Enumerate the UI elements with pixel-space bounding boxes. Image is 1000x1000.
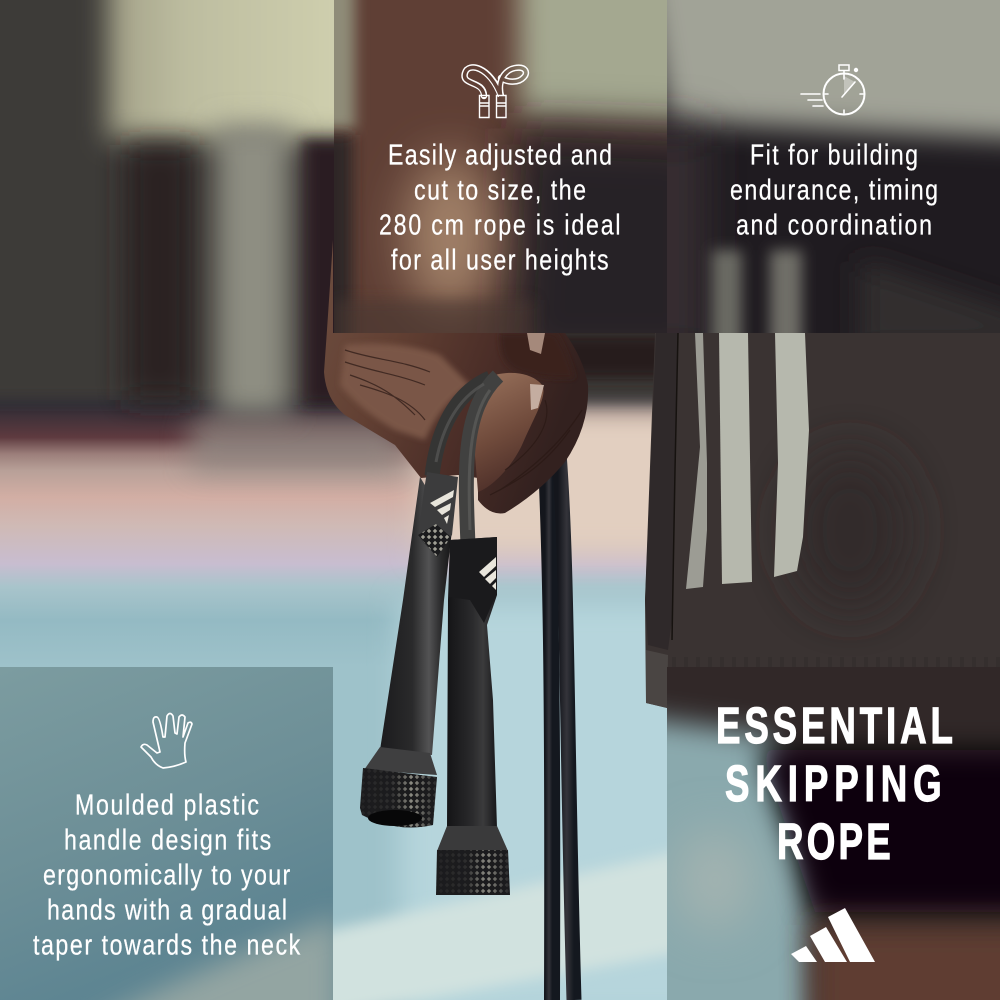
handle 1 tag (418, 472, 458, 557)
text: handle design: handle design fits (64, 823, 271, 856)
text: rope length: Easily adjusted and (388, 138, 612, 171)
text: handle design (33, 788, 301, 961)
stripe 3 (774, 333, 809, 577)
skipping rope handle 2 (436, 537, 510, 895)
panel: bottom right, product title (667, 667, 1000, 1000)
text: endurance: endurance, timing (730, 173, 938, 206)
text: rope length (379, 138, 621, 276)
rope cords from handles over thumb (432, 376, 498, 545)
text: endurance (730, 143, 937, 235)
logo: adidas three bars (791, 908, 875, 962)
handle 2 logo (479, 557, 496, 590)
title: ESSENTIAL (716, 698, 953, 754)
text: endurance: and coordination (736, 208, 932, 241)
title: SKIPPING (725, 756, 942, 812)
skipping rope handle 1 (360, 472, 458, 827)
text: handle design: taper towards the neck (33, 928, 301, 961)
stripe 1 (686, 333, 707, 589)
text: rope length: cut to size, the (414, 173, 586, 206)
shorts with three stripes (640, 333, 1000, 713)
handle 1 logo (430, 490, 454, 524)
panel: top right, endurance (667, 0, 1000, 333)
thumb (472, 373, 544, 492)
text: handle design: Moulded plastic (75, 788, 259, 821)
icon: stopwatch (801, 65, 864, 114)
title: ROPE (777, 814, 891, 870)
stripe 2 (719, 333, 752, 584)
text: handle design: ergonomically to your (43, 858, 290, 891)
text: handle design: hands with a gradual (47, 893, 287, 926)
icon: rope (461, 64, 530, 118)
icon: hand (141, 714, 192, 768)
handle 2 tag (449, 537, 497, 623)
text: endurance: Fit for building (750, 138, 918, 171)
back rope strands (545, 440, 574, 1000)
text: rope length: 280 cm rope is ideal (379, 208, 621, 241)
panel: bottom left, handle design (0, 667, 340, 1000)
text: rope length: for all user heights (391, 243, 609, 276)
hand (324, 240, 588, 513)
title (718, 706, 952, 860)
panel: top centre, rope length (334, 0, 667, 333)
